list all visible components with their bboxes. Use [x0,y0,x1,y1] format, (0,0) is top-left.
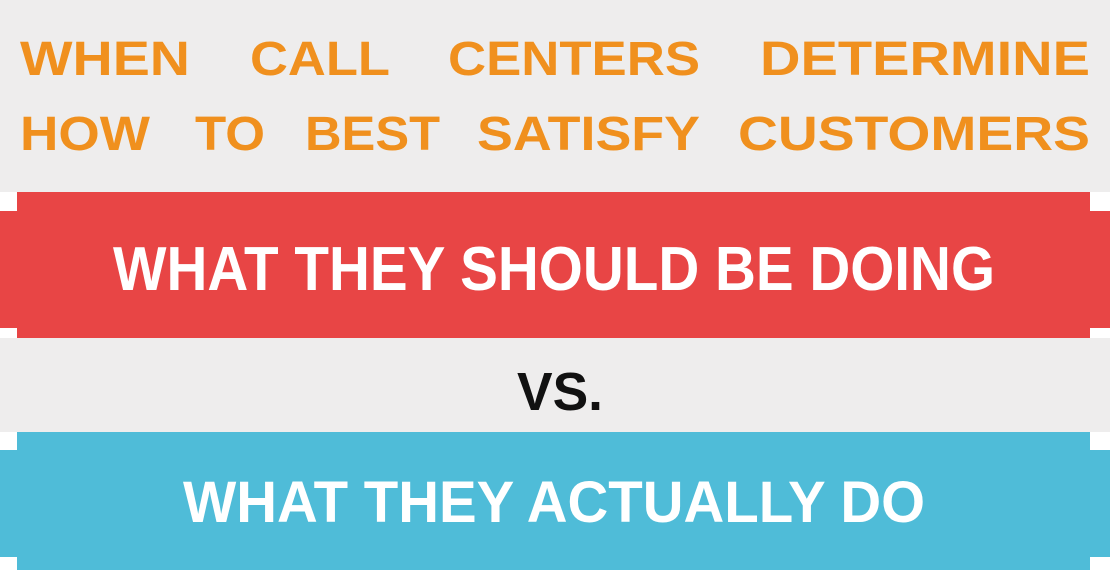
title: WHEN [20,33,190,86]
title: CALL [250,33,390,86]
title: TO [195,108,265,161]
title: SATISFY [477,108,700,161]
red banner: what they should be doing [0,192,1110,338]
blue banner: what they actually do [0,432,1110,570]
title: CENTERS [448,33,700,86]
title: CUSTOMERS [738,108,1090,161]
red banner: what they should be doing: WHAT THEY SHOULD BE DOING [113,235,995,304]
blue banner: what they actually do: WHAT THEY ACTUALLY DO [183,470,925,535]
title [20,33,1090,161]
title: HOW [20,108,151,161]
title: DETERMINE [760,33,1090,86]
title: BEST [305,108,440,161]
vs label: VS. [517,362,603,422]
